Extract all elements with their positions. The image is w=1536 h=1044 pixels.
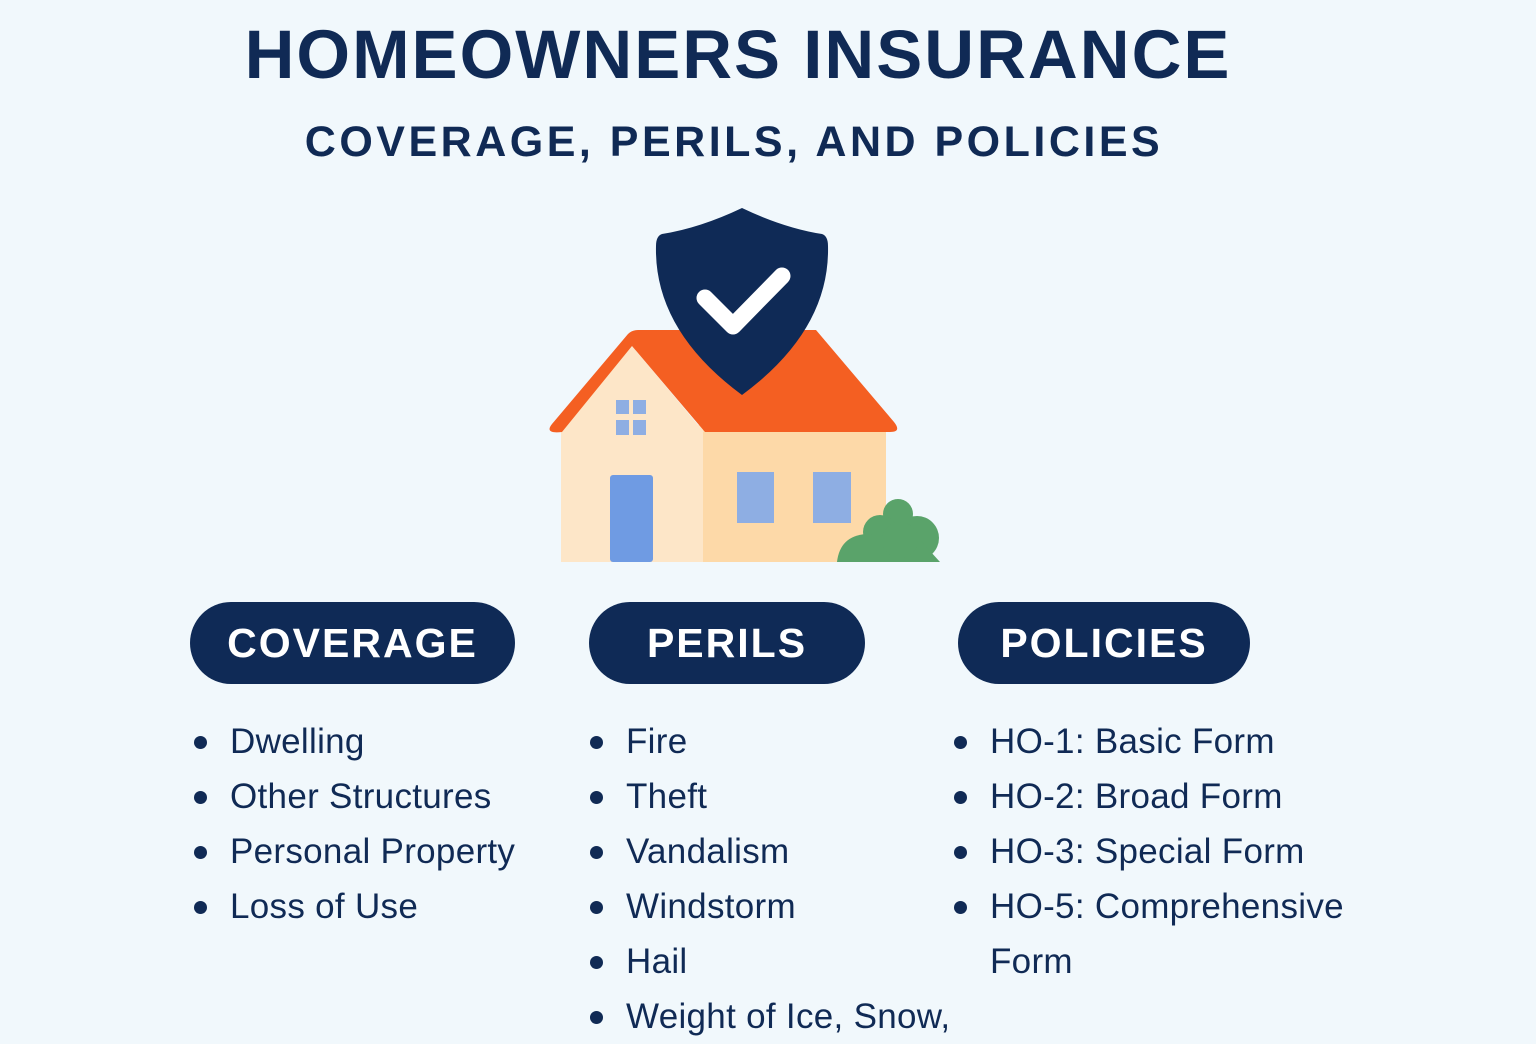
list: perils: Theft — [626, 777, 707, 816]
list: policies — [954, 722, 1344, 981]
pill: perils: PERILS — [647, 620, 807, 666]
pill: policies: POLICIES — [1000, 620, 1208, 666]
shield — [656, 208, 828, 395]
list: perils: Windstorm — [626, 887, 796, 926]
subtitle: COVERAGE, PERILS, AND POLICIES — [305, 118, 1163, 166]
list: policies: HO-1: Basic Form — [990, 722, 1275, 761]
list: perils — [590, 722, 950, 1036]
list: policies: HO-3: Special Form — [990, 832, 1305, 871]
icon: house with shield — [550, 208, 940, 562]
pill: perils — [589, 602, 865, 684]
list: coverage: Other Structures — [230, 777, 492, 816]
list: policies: HO-5: Comprehensive — [990, 887, 1344, 926]
list: policies: HO-2: Broad Form — [990, 777, 1283, 816]
list: perils: Vandalism — [626, 832, 790, 871]
list: policies: Form — [990, 942, 1073, 981]
list: coverage: Dwelling — [230, 722, 365, 761]
list: coverage: Personal Property — [230, 832, 515, 871]
list: coverage — [194, 722, 515, 926]
list: perils: Hail — [626, 942, 688, 981]
title: HOMEOWNERS INSURANCE — [245, 16, 1231, 93]
pill: coverage: COVERAGE — [227, 620, 478, 666]
pill: policies — [958, 602, 1250, 684]
list: coverage: Loss of Use — [230, 887, 418, 926]
list: perils: Weight of Ice, Snow, — [626, 997, 950, 1036]
list: perils: Fire — [626, 722, 687, 761]
pill: coverage — [190, 602, 515, 684]
